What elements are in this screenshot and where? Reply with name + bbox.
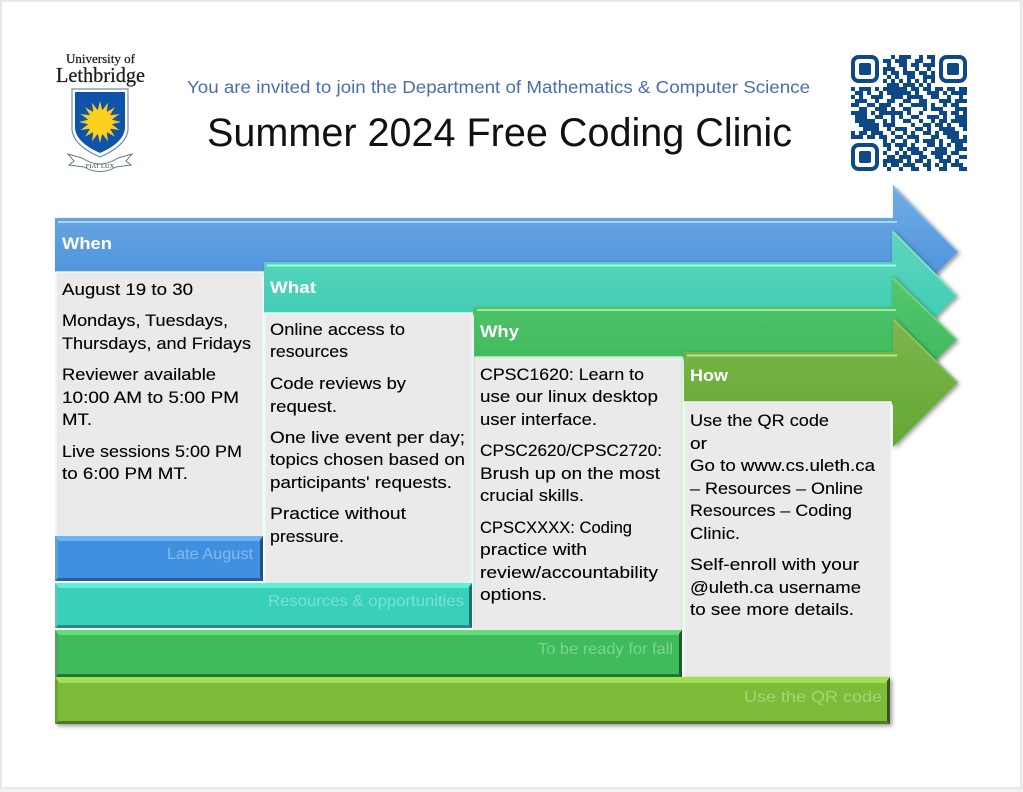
panel: What details: request.: [270, 397, 337, 416]
panel: What details: Online access to: [270, 320, 405, 339]
title: Summer 2024 Free Coding Clinic: [207, 111, 792, 155]
bar: Late August: [55, 536, 263, 581]
panel: When details: Live sessions 5:00 PM: [62, 442, 242, 461]
panel: When details: MT.: [62, 410, 92, 429]
panel: When details: Reviewer available: [62, 365, 216, 384]
panel: Why details: use our linux desktop: [480, 387, 658, 406]
logo wordmark: Lethbridge: [56, 63, 145, 87]
panel: When details: to 6:00 PM MT.: [62, 464, 188, 483]
bar: Use the QR code: Use the QR code: [744, 689, 882, 706]
heading: When: When: [62, 234, 112, 253]
panel: What details: pressure.: [270, 527, 344, 546]
panel: What details: Practice without: [270, 504, 406, 523]
panel: How details: [684, 402, 891, 678]
panel: Why details: CPSC1620: Learn to: [480, 365, 644, 384]
arrow: What: [264, 229, 957, 361]
icon: QR code: [851, 57, 967, 169]
arrow: When: [55, 185, 958, 318]
panel: How details: Go to www.cs.uleth.ca: [690, 456, 876, 475]
panel: When details: August 19 to 30: [62, 280, 193, 299]
panel: How details: Self-enroll with your: [690, 555, 859, 574]
bar: Late August: Late August: [167, 546, 254, 563]
panel: Why details: CPSCXXXX: Coding: [480, 518, 632, 537]
heading: Why: Why: [480, 322, 520, 341]
bar: Resources & opportunities: [55, 583, 472, 628]
panel: How details: Clinic.: [690, 524, 740, 543]
panel: How details: @uleth.ca username: [690, 578, 861, 597]
panel: What details: Code reviews by: [270, 374, 407, 393]
panel: What details: [265, 313, 472, 584]
panel: How details: – Resources – Online: [690, 479, 863, 498]
panel: Why details: practice with: [480, 540, 587, 559]
heading: What: What: [270, 278, 316, 297]
panel: Why details: options.: [480, 585, 547, 604]
panel: How details: Use the QR code: [690, 411, 829, 430]
panel: When details: [56, 272, 263, 538]
invitation line: You are invited to join the Department of Mathematics & Computer Science: [187, 77, 810, 97]
panel: What details: resources: [270, 342, 348, 361]
arrow: Why: [474, 275, 957, 404]
bar: Resources & opportunities: Resources & opportunities: [268, 593, 464, 610]
panel: When details: Thursdays, and Fridays: [62, 334, 251, 353]
bar: Use the QR code: [55, 677, 890, 724]
heading: How: How: [690, 366, 729, 385]
panel: How details: Resources – Coding: [690, 501, 852, 520]
panel: What details: topics chosen based on: [270, 450, 465, 469]
panel: When details: 10:00 AM to 5:00 PM: [62, 388, 239, 407]
panel: How details: or: [690, 434, 707, 453]
panel: Why details: review/accountability: [480, 563, 659, 582]
panel: What details: participants' requests.: [270, 473, 452, 492]
icon: FIAT LUX banner: FIAT LUX: [86, 163, 115, 170]
icon: shield with sun: [72, 89, 128, 157]
panel: How details: to see more details.: [690, 600, 854, 619]
panel: Why details: Brush up on the most: [480, 464, 660, 483]
panel: What details: One live event per day;: [270, 428, 465, 447]
panel: Why details: CPSC2620/CPSC2720:: [480, 441, 662, 460]
bar: To be ready for fall: To be ready for fall: [538, 641, 673, 658]
logo wordmark: University of: [66, 52, 136, 66]
arrow: How: [684, 317, 958, 447]
logo wordmark: [56, 52, 145, 87]
logo: University of Lethbridge: [56, 52, 145, 172]
panel: Why details: [474, 357, 682, 631]
panel: When details: Mondays, Tuesdays,: [62, 311, 228, 330]
panel: Why details: user interface.: [480, 410, 597, 429]
panel: Why details: crucial skills.: [480, 486, 584, 505]
bar: To be ready for fall: [55, 630, 682, 677]
